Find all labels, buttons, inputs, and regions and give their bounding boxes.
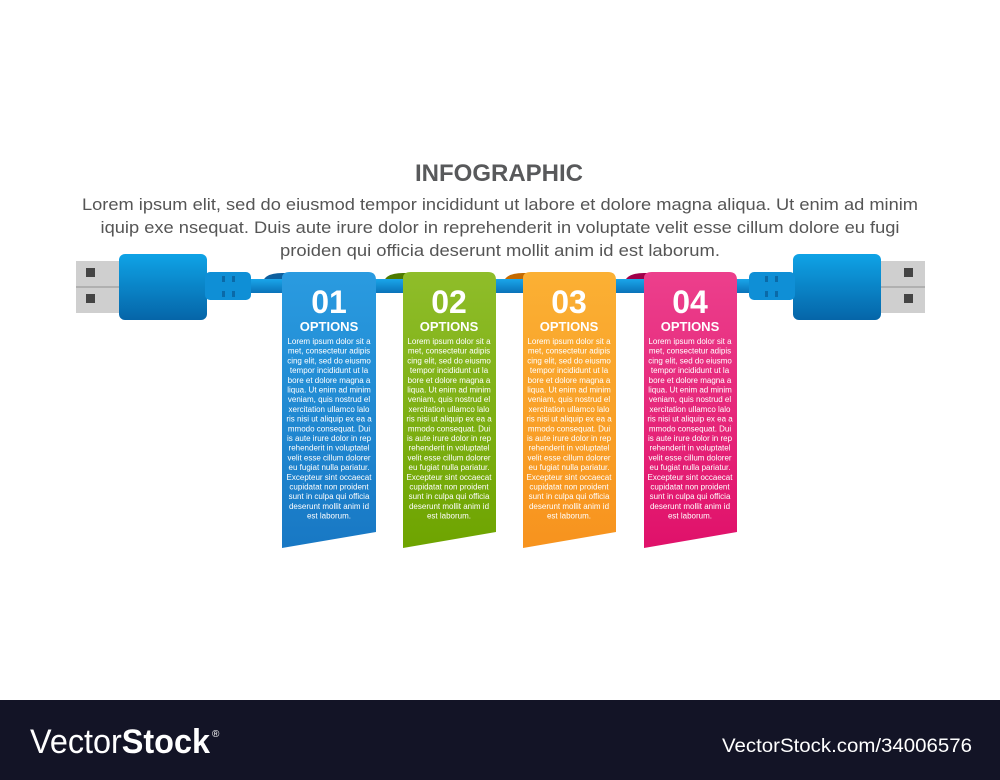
ribbon body texts: cupidatat non proident bbox=[650, 482, 730, 492]
ribbon body texts: cing elit, sed do eiusmo bbox=[287, 356, 371, 365]
ribbon body texts: Lorem ipsum dolor sit a bbox=[407, 337, 491, 346]
ribbon body texts: liqua. Ut enim ad minim bbox=[407, 386, 491, 394]
ribbon body texts: est laborum. bbox=[547, 512, 591, 521]
ribbon body texts: tempor incididunt ut la bbox=[410, 366, 489, 375]
panel: option 02 bbox=[376, 272, 496, 548]
ribbon body texts: deserunt mollit anim id bbox=[650, 502, 730, 511]
ribbon body texts: Lorem ipsum dolor sit a bbox=[287, 337, 371, 346]
panel: option 02: 02 bbox=[431, 284, 467, 320]
ribbon body texts: cupidatat non proident bbox=[529, 482, 609, 492]
ribbon body texts: ris nisi ut aliquip ex ea a bbox=[286, 415, 372, 424]
ribbon body texts: velit esse cillum dolorer bbox=[648, 453, 732, 462]
ribbon body texts: rehenderit in voluptatel bbox=[650, 444, 731, 453]
ribbon body texts: bore et dolore magna a bbox=[408, 376, 491, 385]
ribbon body texts: est laborum. bbox=[668, 512, 712, 521]
ribbon body texts: sunt in culpa qui officia bbox=[409, 492, 490, 501]
ribbon body texts: est laborum. bbox=[427, 512, 471, 521]
ribbon body texts: sunt in culpa qui officia bbox=[289, 492, 370, 501]
panel: option 03: 03 bbox=[551, 284, 587, 320]
ribbon body texts: cing elit, sed do eiusmo bbox=[648, 356, 732, 365]
ribbon body texts: deserunt mollit anim id bbox=[409, 502, 489, 511]
ribbon body texts: xercitation ullamco lalo bbox=[650, 405, 731, 414]
ribbon body texts: is aute irure dolor in rep bbox=[648, 434, 733, 443]
ribbon body texts: liqua. Ut enim ad minim bbox=[287, 386, 371, 394]
ribbon body texts: veniam, quis nostrud el bbox=[408, 395, 490, 404]
panel: option 01 bbox=[258, 272, 376, 548]
ribbon body texts: xercitation ullamco lalo bbox=[409, 405, 490, 414]
ribbon body texts: cing elit, sed do eiusmo bbox=[407, 356, 491, 365]
ribbon body texts: Excepteur sint occaecat bbox=[527, 473, 612, 482]
ribbon body texts: mmodo consequat. Dui bbox=[408, 424, 490, 433]
ribbon body texts bbox=[286, 337, 733, 521]
ribbon body texts: deserunt mollit anim id bbox=[529, 502, 609, 511]
ribbon body texts: met, consectetur adipis bbox=[408, 347, 490, 356]
panel: option 04: OPTIONS bbox=[661, 319, 720, 334]
ribbon body texts: bore et dolore magna a bbox=[528, 376, 611, 385]
intro paragraph: iquip exe nsequat. Duis aute irure dolor in reprehenderit in voluptate velit esse cillum dolore eu fugi bbox=[100, 218, 900, 237]
ribbon body texts: rehenderit in voluptatel bbox=[529, 444, 610, 453]
title: INFOGRAPHIC bbox=[415, 160, 583, 187]
ribbon body texts: liqua. Ut enim ad minim bbox=[648, 386, 732, 394]
ribbon body texts: Excepteur sint occaecat bbox=[407, 473, 492, 482]
ribbon body texts: ris nisi ut aliquip ex ea a bbox=[526, 415, 612, 424]
ribbon body texts: is aute irure dolor in rep bbox=[287, 434, 372, 443]
ribbon body texts: veniam, quis nostrud el bbox=[649, 395, 731, 404]
ribbon body texts: velit esse cillum dolorer bbox=[287, 453, 371, 462]
ribbon body texts: deserunt mollit anim id bbox=[289, 502, 369, 511]
ribbon body texts: tempor incididunt ut la bbox=[651, 366, 730, 375]
ribbon body texts: Excepteur sint occaecat bbox=[648, 473, 733, 482]
ribbon body texts: eu fugiat nulla pariatur. bbox=[409, 463, 489, 472]
panel: option 04: 04 bbox=[672, 284, 708, 320]
ribbon body texts: met, consectetur adipis bbox=[528, 347, 610, 356]
ribbon body texts: rehenderit in voluptatel bbox=[409, 444, 490, 453]
cable bbox=[240, 279, 760, 293]
ribbon body texts: sunt in culpa qui officia bbox=[650, 492, 731, 501]
ribbon body texts: eu fugiat nulla pariatur. bbox=[529, 463, 609, 472]
footer bar: ® bbox=[212, 729, 220, 740]
footer bar: VectorStock bbox=[30, 723, 210, 761]
ribbon body texts: eu fugiat nulla pariatur. bbox=[650, 463, 730, 472]
panel: option 01: OPTIONS bbox=[300, 319, 359, 334]
ribbon body texts: xercitation ullamco lalo bbox=[529, 405, 610, 414]
ribbon body texts: ris nisi ut aliquip ex ea a bbox=[647, 415, 733, 424]
ribbon body texts: est laborum. bbox=[307, 512, 351, 521]
panel: option 01: 01 bbox=[311, 284, 347, 320]
ribbon body texts: ris nisi ut aliquip ex ea a bbox=[406, 415, 492, 424]
intro paragraph bbox=[82, 195, 918, 260]
ribbon body texts: liqua. Ut enim ad minim bbox=[527, 386, 611, 394]
ribbon body texts: Excepteur sint occaecat bbox=[287, 473, 372, 482]
ribbon body texts: cupidatat non proident bbox=[409, 482, 489, 492]
intro paragraph: Lorem ipsum elit, sed do eiusmod tempor incididunt ut labore et dolore magna aliqua. Ut enim ad minim bbox=[82, 195, 918, 214]
panel: option 04 bbox=[616, 272, 737, 548]
footer bar bbox=[0, 700, 1000, 780]
footer bar: VectorStock.com/34006576 bbox=[722, 736, 972, 757]
panel: option 02: OPTIONS bbox=[420, 319, 479, 334]
ribbon body texts: met, consectetur adipis bbox=[288, 347, 370, 356]
ribbon body texts: met, consectetur adipis bbox=[649, 347, 731, 356]
icon: right usb plug bbox=[749, 254, 925, 320]
ribbon body texts: velit esse cillum dolorer bbox=[407, 453, 491, 462]
ribbon body texts: mmodo consequat. Dui bbox=[528, 424, 610, 433]
ribbon body texts: velit esse cillum dolorer bbox=[527, 453, 611, 462]
ribbon body texts: veniam, quis nostrud el bbox=[288, 395, 370, 404]
ribbon body texts: cupidatat non proident bbox=[289, 482, 369, 492]
ribbon body texts: mmodo consequat. Dui bbox=[288, 424, 370, 433]
ribbon body texts: xercitation ullamco lalo bbox=[289, 405, 370, 414]
ribbon body texts: bore et dolore magna a bbox=[288, 376, 371, 385]
ribbon body texts: rehenderit in voluptatel bbox=[289, 444, 370, 453]
ribbon body texts: mmodo consequat. Dui bbox=[649, 424, 731, 433]
intro paragraph: proiden qui officia deserunt mollit anim id est laborum. bbox=[280, 241, 720, 260]
icon: left usb plug bbox=[76, 254, 251, 320]
ribbon body texts: Lorem ipsum dolor sit a bbox=[527, 337, 611, 346]
ribbon body texts: Lorem ipsum dolor sit a bbox=[648, 337, 732, 346]
ribbon body texts: is aute irure dolor in rep bbox=[407, 434, 492, 443]
ribbon body texts: is aute irure dolor in rep bbox=[527, 434, 612, 443]
ribbon body texts: tempor incididunt ut la bbox=[290, 366, 369, 375]
ribbon body texts: sunt in culpa qui officia bbox=[529, 492, 610, 501]
ribbon body texts: veniam, quis nostrud el bbox=[528, 395, 610, 404]
ribbon body texts: cing elit, sed do eiusmo bbox=[527, 356, 611, 365]
ribbon body texts: tempor incididunt ut la bbox=[530, 366, 609, 375]
ribbon body texts: bore et dolore magna a bbox=[649, 376, 732, 385]
ribbon body texts: eu fugiat nulla pariatur. bbox=[289, 463, 369, 472]
panel: option 03 bbox=[496, 272, 616, 548]
panel: option 03: OPTIONS bbox=[540, 319, 599, 334]
